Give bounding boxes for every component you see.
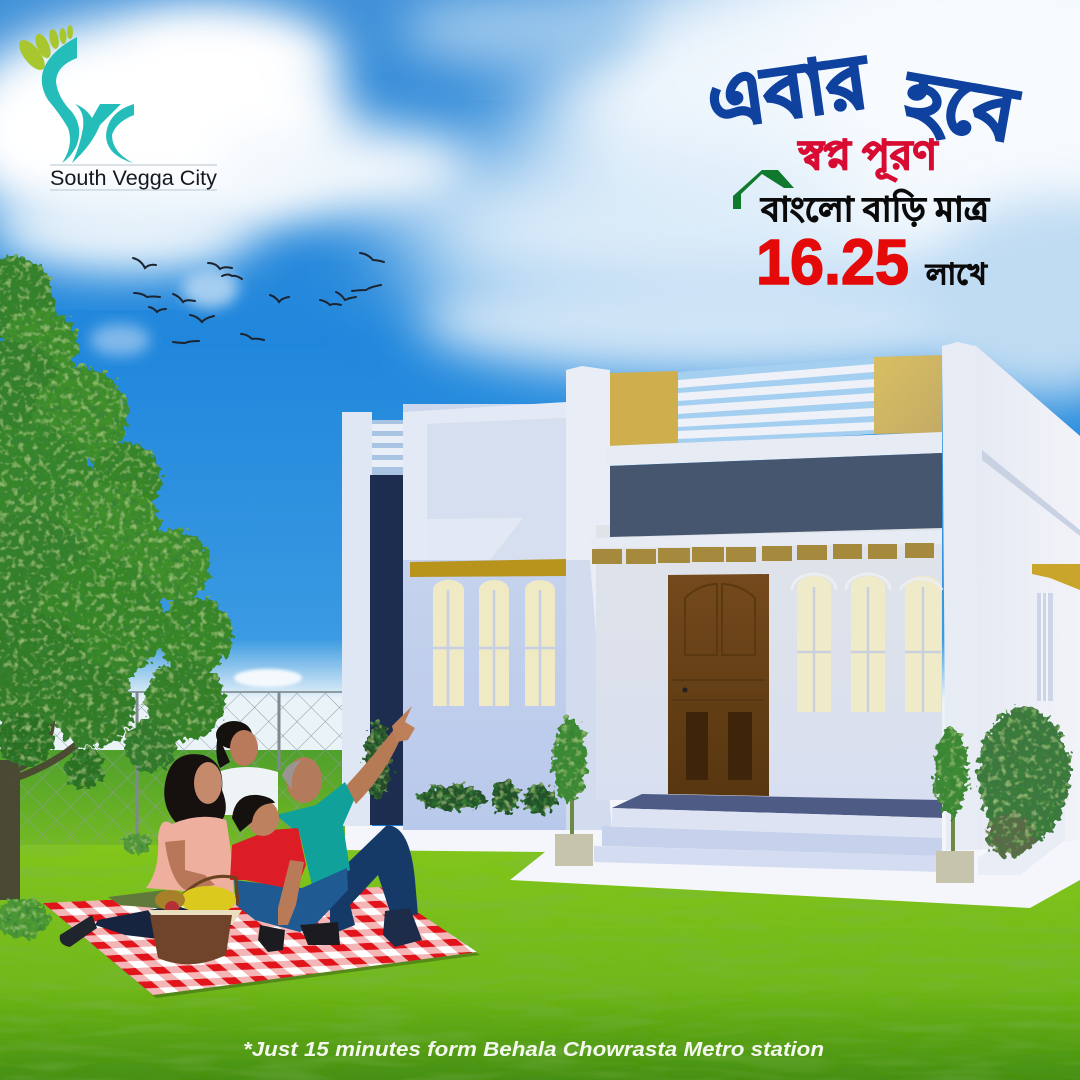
dark slate panel bbox=[610, 453, 942, 537]
background field bbox=[0, 750, 345, 860]
plant bed bbox=[978, 808, 1065, 875]
dark stone strip bbox=[370, 475, 403, 825]
house bbox=[342, 342, 1080, 908]
porch beam bbox=[590, 530, 942, 548]
girl bbox=[216, 721, 278, 815]
headline: এবার হবে: হবে bbox=[896, 55, 1025, 157]
left wing upper panel bbox=[427, 418, 566, 560]
left wing frame bbox=[403, 402, 566, 560]
far left pillar bbox=[342, 412, 372, 826]
right windows bbox=[792, 574, 942, 712]
birds bbox=[133, 253, 384, 343]
price: 16.25: 16.25 bbox=[756, 226, 909, 298]
tree bbox=[0, 256, 233, 900]
right pillar bbox=[942, 342, 978, 850]
headline bbox=[703, 39, 1025, 298]
lawn bbox=[0, 845, 1080, 1080]
yellow block right bbox=[874, 355, 942, 434]
woman bbox=[60, 754, 234, 947]
grass tuft bbox=[0, 833, 152, 938]
roof rails bbox=[678, 364, 874, 439]
left windows bbox=[433, 580, 555, 706]
side wall ledge bbox=[982, 450, 1080, 536]
left wing wall bbox=[403, 404, 566, 830]
picnic blanket bbox=[43, 887, 480, 998]
central pillar bbox=[566, 366, 610, 830]
potted plant left bbox=[553, 718, 593, 866]
round bush bbox=[978, 707, 1070, 857]
louvres bbox=[372, 420, 403, 475]
tree foliage bbox=[0, 256, 233, 788]
logo leaves bbox=[15, 25, 73, 74]
pillar lower shade bbox=[566, 560, 612, 830]
clouds bbox=[0, 0, 1080, 687]
wooden door bbox=[668, 574, 769, 796]
sky background bbox=[0, 0, 1080, 760]
tree trunk bbox=[0, 760, 20, 900]
headline: এবার হবে bbox=[703, 39, 1025, 157]
family bbox=[60, 706, 422, 964]
yellow block left bbox=[610, 371, 678, 446]
roof beam bbox=[606, 432, 942, 466]
subheading: স্বপ্ন পূরণ: স্বপ্ন পূরণ bbox=[797, 132, 938, 182]
footer note: *Just 15 minutes form Behala Chowrasta Metro station bbox=[243, 1038, 824, 1061]
paved plinth bbox=[345, 800, 1080, 908]
front porch wall bbox=[596, 525, 942, 800]
potted plant right bbox=[934, 728, 974, 883]
left wing lit area bbox=[427, 518, 523, 560]
tree branches bbox=[10, 700, 100, 780]
chain-link fence bbox=[18, 692, 343, 845]
ground shrubs bbox=[364, 722, 556, 815]
corbels bbox=[592, 543, 934, 564]
left awning bbox=[410, 559, 566, 577]
man bbox=[276, 706, 422, 947]
fruit basket bbox=[108, 876, 242, 964]
steps bbox=[594, 808, 942, 872]
logo name: South Vegga City bbox=[50, 166, 217, 190]
side window bbox=[1037, 593, 1053, 701]
logo SVC monogram bbox=[42, 37, 134, 163]
right awning bbox=[1032, 564, 1080, 590]
porch floor bbox=[612, 794, 942, 818]
boy bbox=[230, 795, 348, 952]
side wall bbox=[975, 345, 1080, 850]
text: বাংলো বাড়ি মাত্র: বাংলো বাড়ি মাত্র bbox=[760, 189, 990, 229]
icon: green house roof bbox=[733, 170, 794, 209]
logo bbox=[15, 25, 217, 190]
logo rules bbox=[50, 165, 217, 190]
rail backdrop bbox=[678, 358, 874, 446]
headline: এবার হবে: এবার bbox=[703, 39, 875, 144]
price unit: লাখে: লাখে bbox=[925, 259, 988, 291]
